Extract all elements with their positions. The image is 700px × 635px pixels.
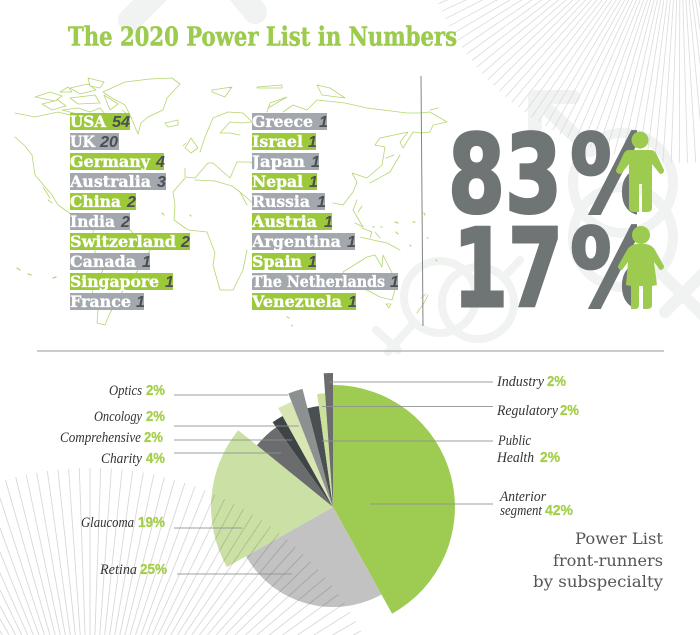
- country list: left column: Switzerland: [70, 232, 176, 251]
- label: Optics: [109, 382, 165, 399]
- country list: left column: UK: [70, 132, 95, 151]
- label: Regulatory: 2%: [560, 402, 579, 419]
- country list: right column: Greece: [252, 112, 313, 131]
- country list: right column: 1: [308, 134, 317, 151]
- label: Comprehensive: 2%: [144, 429, 163, 446]
- label: Retina: [99, 561, 167, 578]
- country list: left column: 1: [136, 294, 145, 311]
- stat: 83% men: %: [570, 113, 662, 238]
- leader lines: [174, 382, 493, 574]
- country list: right column: 1: [311, 154, 320, 171]
- country list: left column: 1: [165, 274, 174, 291]
- country list: right column: Japan: [250, 152, 305, 171]
- caption: front-runners by subspecialty: [533, 529, 664, 591]
- country list: right column: Venezuela: [251, 292, 342, 311]
- country list: right column: Nepal: [252, 172, 303, 191]
- label: Industry: Industry: [496, 374, 544, 390]
- country list: left column: USA: [70, 112, 107, 131]
- label: Glaucoma: Glaucoma: [81, 515, 134, 531]
- country list: right column: 1: [347, 234, 356, 251]
- label: Optics: 2%: [146, 382, 165, 399]
- country list: left column: [69, 112, 190, 311]
- stat: 17% women: 17: [453, 207, 563, 332]
- label: Optics: Optics: [109, 383, 142, 399]
- country list: left column: 2: [180, 234, 190, 251]
- caption: front-runners by subspecialty: Power List: [575, 529, 664, 548]
- country list: right column: 1: [390, 274, 399, 291]
- country list: right column: 1: [309, 174, 318, 191]
- label: Public Health: [496, 433, 560, 466]
- country list: right column: Israel: [252, 132, 303, 151]
- label: Retina: 25%: [140, 561, 167, 578]
- caption: front-runners by subspecialty: front-runners: [553, 551, 663, 570]
- country list: right column: Russia: [252, 192, 310, 211]
- country list: left column: 4: [155, 154, 165, 171]
- label: Retina: Retina: [99, 562, 137, 578]
- label: Oncology: Oncology: [94, 409, 142, 425]
- label: Public Health: 2%: [540, 449, 560, 466]
- country list: right column: Austria: [251, 212, 317, 231]
- country list: left column: France: [70, 292, 131, 311]
- label: Comprehensive: Comprehensive: [60, 430, 141, 446]
- country list: right column: 1: [324, 214, 333, 231]
- country list: right column: [250, 112, 399, 311]
- country list: left column: China: [70, 192, 121, 211]
- stat: 17% women: %: [570, 207, 662, 332]
- sunburst: bottom left: [0, 468, 361, 635]
- label: Glaucoma: 19%: [138, 514, 165, 531]
- label: Anterior segment: Anterior: [499, 489, 546, 505]
- background gender symbols: [130, 0, 700, 352]
- pie chart: subspecialty share: [211, 373, 455, 614]
- sunburst: top right: [520, 0, 700, 60]
- stat: 83% men: [452, 130, 664, 215]
- country list: left column: 20: [99, 134, 118, 151]
- country list: left column: 2: [120, 214, 130, 231]
- label: Oncology: 2%: [146, 408, 165, 425]
- caption: front-runners by subspecialty: by subspecialty: [533, 572, 663, 591]
- world map: [15, 78, 447, 326]
- stat: 17% women: [460, 224, 664, 309]
- label: Industry: [496, 373, 566, 390]
- country list: right column: 1: [319, 114, 328, 131]
- stat: 83% men: 83: [448, 113, 562, 238]
- label: Charity: 4%: [146, 450, 165, 467]
- label: Anterior segment: segment: [500, 503, 543, 519]
- country list: left column: 54: [112, 114, 130, 131]
- country list: left column: Germany: [70, 152, 151, 171]
- country list: left column: 2: [126, 194, 136, 211]
- country list: right column: The Netherlands: [252, 272, 385, 291]
- country list: right column: 1: [317, 194, 326, 211]
- country list: left column: Canada: [70, 252, 136, 271]
- label: Charity: Charity: [101, 451, 142, 467]
- horizontal divider: [37, 350, 664, 352]
- label: Charity: [101, 450, 165, 467]
- country list: left column: India: [70, 212, 115, 231]
- country list: left column: Singapore: [70, 272, 159, 291]
- country list: right column: Spain: [252, 252, 302, 271]
- country list: right column: Argentina: [251, 232, 341, 251]
- country list: left column: Australia: [69, 172, 151, 191]
- label: Industry: 2%: [547, 373, 566, 390]
- country list: right column: 1: [308, 254, 317, 271]
- vertical divider: [421, 76, 423, 326]
- label: Anterior segment: 42%: [545, 502, 573, 519]
- country list: right column: 1: [348, 294, 357, 311]
- country list: left column: 3: [157, 174, 166, 191]
- label: Regulatory: Regulatory: [496, 403, 558, 419]
- label: Anterior segment: [499, 489, 573, 519]
- label: Public Health: Public: [497, 433, 531, 449]
- label: Public Health: Health: [496, 450, 534, 466]
- title: The 2020 Power List in Numbers: [68, 22, 457, 52]
- country list: left column: 1: [142, 254, 151, 271]
